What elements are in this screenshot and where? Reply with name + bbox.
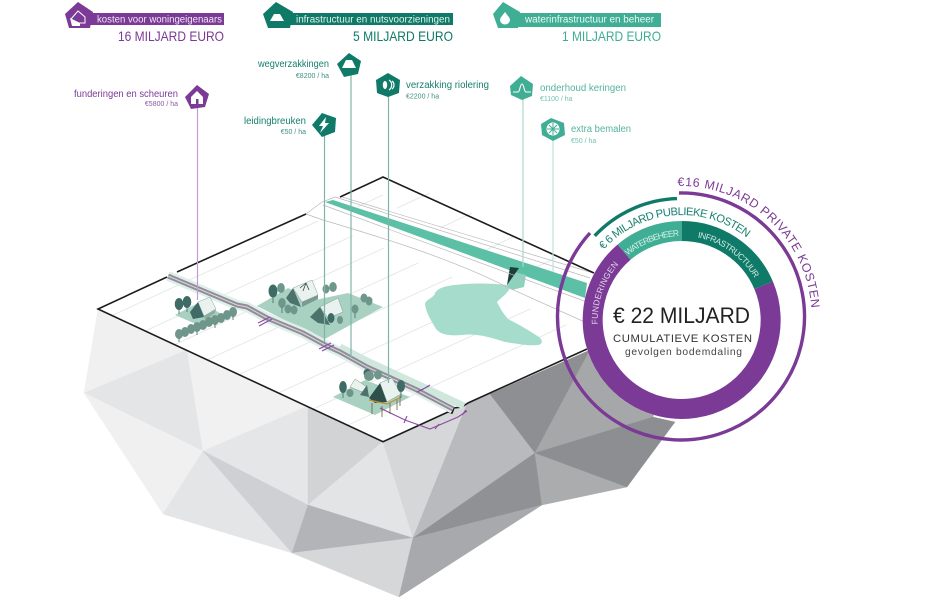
arc: private costs: [558, 193, 805, 440]
arc label: private costs: €16 MILJARD PRIVATE KOSTEN: [678, 178, 820, 308]
donut chart: total costs: [582, 221, 781, 419]
label: funderingen en scheuren: funderingen en scheuren: [74, 89, 178, 100]
faceted grey ground block: [84, 309, 680, 597]
header: woningeigenaars: [65, 2, 224, 44]
leader lines: [198, 74, 553, 383]
donut total: € 22 MILJARD: [613, 303, 750, 328]
header: infrastructuur: infrastructuur en nutsvoorzieningen: [296, 14, 450, 26]
segment: funderingen: [593, 252, 771, 409]
label: verzakking riolering: verzakking riolering: [406, 80, 489, 91]
ring label: funderingen: FUNDERINGEN: [592, 261, 618, 324]
house: on stilts: [369, 378, 401, 417]
field parcel lines: [112, 193, 566, 425]
house: right of plot: [310, 298, 343, 325]
icon: road: [263, 2, 293, 28]
amount: 5 MILJARD EURO: [353, 28, 453, 44]
ring label: infrastructuur: INFRASTRUCTUUR: [698, 232, 759, 278]
road with cables: [168, 276, 464, 409]
plateau black outline: [98, 177, 594, 442]
dike with teal band: [306, 197, 593, 323]
icon: water drop: [493, 2, 520, 28]
label: onderhoud keringen: onderhoud keringen: [540, 83, 626, 94]
label: leidingbreuken: leidingbreuken: [244, 116, 306, 127]
water flood: [425, 284, 542, 345]
header: waterinfrastructuur: waterinfrastructuur en beheer: [524, 14, 655, 26]
donut subtitle: CUMULATIEVE KOSTEN: [613, 333, 752, 345]
label: verzakking riolering: €2200 / ha: [406, 94, 439, 100]
header: woningeigenaars: kosten voor woningeigenaars: [97, 14, 222, 26]
header: waterinfrastructuur: [493, 2, 661, 44]
ring label: waterbeheer: WATERBEHEER: [624, 230, 679, 254]
plateau surface: [98, 177, 672, 442]
label: leidingbreuken: [244, 113, 336, 137]
house: cracked roof: [286, 280, 318, 307]
label: leidingbreuken: €50 / ha: [281, 129, 306, 136]
purple pipe and cross marks: [258, 317, 467, 429]
label: funderingen en scheuren: €5800 / ha: [145, 101, 178, 108]
house: small on lower plot: [350, 379, 369, 397]
label: extra bemalen: extra bemalen: [571, 124, 631, 135]
arc label: public costs: € 6 MILJARD PUBLIEKE KOSTEN: [600, 207, 751, 248]
label: funderingen en scheuren: [74, 85, 209, 109]
label: extra bemalen: €50 / ha: [571, 138, 596, 145]
houses: [190, 280, 401, 417]
arc: public costs: [595, 199, 677, 236]
label: verzakking riolering: [376, 73, 489, 100]
header: infrastructuur: [263, 2, 453, 44]
segment: waterbeheer: [624, 231, 682, 252]
label: onderhoud keringen: €1100 / ha: [540, 96, 573, 103]
trees: [175, 282, 405, 398]
icon: house: [65, 2, 93, 28]
segment: infrastructuur: [682, 231, 764, 285]
label: wegverzakkingen: €8200 / ha: [296, 73, 329, 80]
label: extra bemalen: [541, 118, 631, 145]
amount: 1 MILJARD EURO: [562, 28, 661, 44]
donut caption: gevolgen bodemdaling: [625, 347, 742, 358]
label: onderhoud keringen: [510, 76, 626, 103]
house: left plot: [190, 297, 216, 320]
amount: 16 MILJARD EURO: [118, 28, 224, 44]
label: wegverzakkingen: [257, 53, 361, 80]
label: wegverzakkingen: wegverzakkingen: [257, 59, 329, 70]
green building plots: [175, 288, 410, 415]
